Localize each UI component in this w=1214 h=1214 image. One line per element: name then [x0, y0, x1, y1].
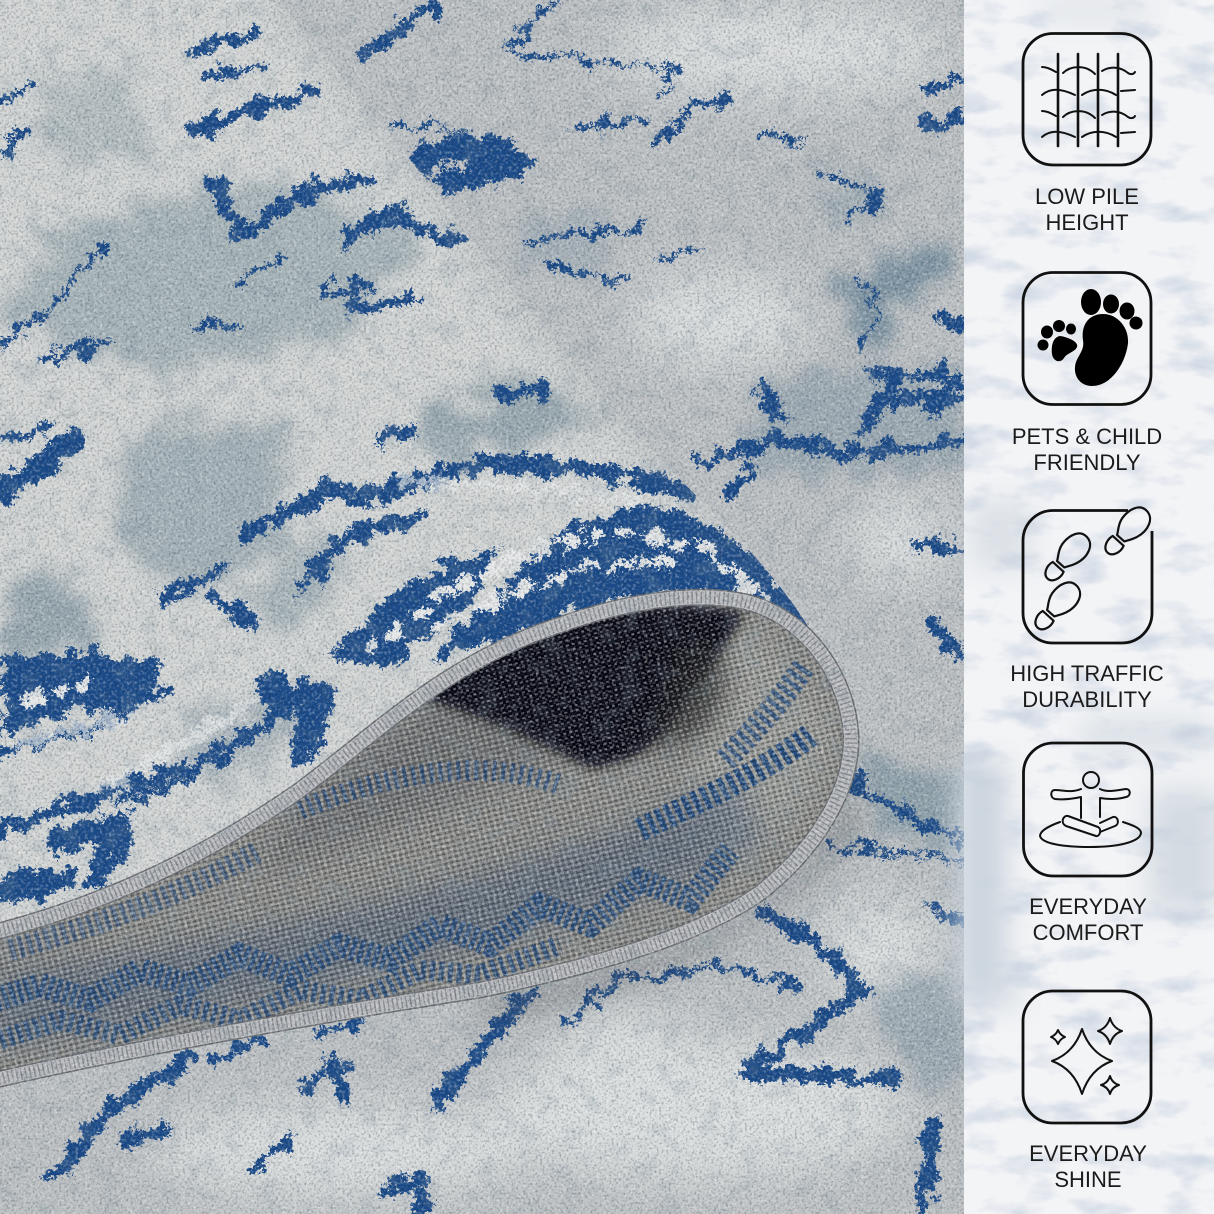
roll edge shading	[271, 0, 806, 624]
icon: paw and footprint	[1023, 272, 1151, 404]
icon: seated figure	[1024, 743, 1152, 876]
roll slate patches	[0, 60, 610, 790]
pile texture overlays	[0, 0, 964, 1214]
label: EVERYDAY	[1029, 894, 1147, 919]
feature: everyday comfort	[1024, 743, 1152, 945]
label: DURABILITY	[1022, 687, 1152, 712]
rug underside with binding	[0, 590, 865, 1090]
feature: low pile height	[1023, 34, 1151, 235]
side panel background	[956, 0, 1214, 1214]
label: COMFORT	[1033, 920, 1143, 945]
feature: everyday shine	[1023, 991, 1151, 1192]
floor navy motifs	[60, 0, 962, 1214]
label: EVERYDAY	[1029, 1141, 1147, 1166]
label: SHINE	[1054, 1167, 1122, 1192]
floor light patches	[150, 5, 950, 1195]
feature: high traffic durability	[1010, 502, 1164, 712]
label: PETS & CHILD	[1012, 424, 1162, 449]
roll navy wide band	[0, 509, 835, 735]
floor rug surface	[0, 0, 964, 1214]
label: FRIENDLY	[1033, 450, 1141, 475]
underside navy pattern	[0, 665, 810, 1040]
floor slate motifs	[520, 170, 964, 1100]
rolled rug top surface	[0, 0, 865, 940]
feature: pets and child friendly	[1012, 272, 1162, 475]
roll navy motifs	[0, 22, 696, 909]
icon: shoe prints	[1023, 502, 1156, 643]
roll light speckle	[20, 480, 780, 790]
label: HIGH TRAFFIC	[1010, 661, 1164, 686]
icon: carpet fibers	[1023, 34, 1151, 165]
binding edge	[0, 597, 851, 1080]
shadow beneath roll	[480, 735, 860, 1020]
label: LOW PILE	[1035, 184, 1139, 209]
icon: sparkles	[1023, 991, 1151, 1123]
underside weave	[0, 590, 865, 1090]
label: HEIGHT	[1045, 210, 1129, 235]
